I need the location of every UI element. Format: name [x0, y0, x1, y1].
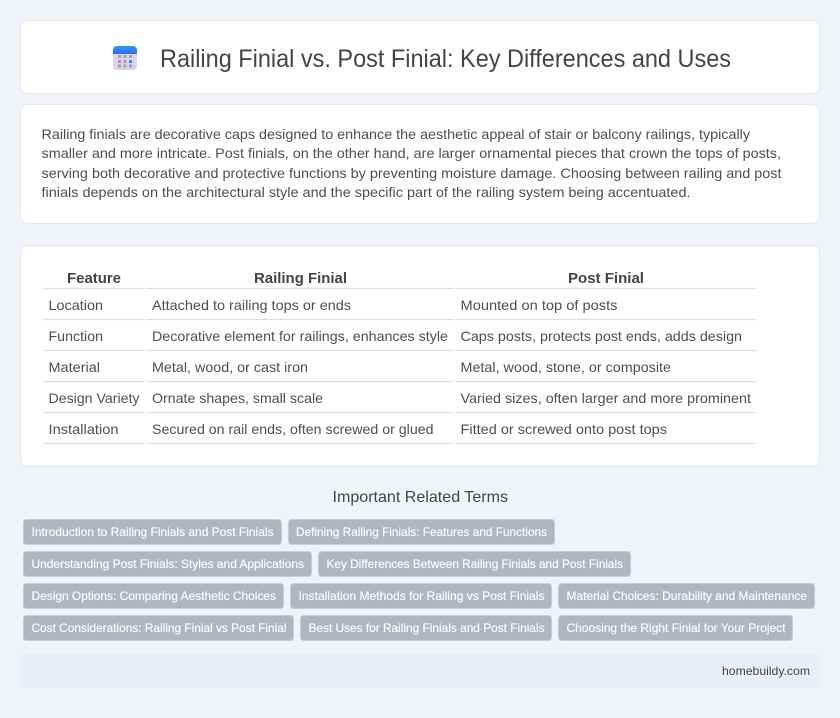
- panel: introduction text: Railing finials are decorative caps designed to enhance the aesthetic appeal of stair or balcony railings, typically: [42, 126, 750, 142]
- table row: design variety: Varied sizes, often larger and more prominent: [460, 390, 751, 406]
- heading: related terms: Important Related Terms: [332, 489, 508, 506]
- table row: installation: [43, 421, 756, 444]
- table row: material: Metal, wood, or cast iron: [152, 359, 308, 375]
- tag: Introduction to Railing Finials and Post Finials: [32, 525, 274, 539]
- tag: Understanding Post Finials: Styles and Applications: [32, 557, 304, 571]
- panel: introduction text: smaller and more intricate. Post finials, on the other hand, are larger ornamental pieces that crown the tops of posts,: [42, 145, 781, 161]
- table row: installation: Secured on rail ends, often screwed or glued: [152, 421, 434, 437]
- table row: material: Material: [48, 359, 100, 375]
- tag: Best Uses for Railing Finials and Post Finials: [308, 621, 544, 635]
- table row: design variety: [43, 390, 756, 412]
- table header row: Railing Finial: [254, 271, 347, 287]
- table row: location: [43, 297, 756, 320]
- tag: Choosing the Right Finial for Your Project: [566, 621, 786, 635]
- panel: introduction text: finials depends on the architectural style and the specific part of the railing system being accentuated.: [42, 184, 690, 200]
- tag: [24, 584, 284, 608]
- panel: introduction text: serving both decorative and protective functions by preventing moisture damage. Choosing between railing and post: [42, 165, 782, 181]
- footer bar: [20, 654, 820, 688]
- table row: location: Attached to railing tops or ends: [152, 297, 351, 313]
- table header row: [43, 271, 756, 288]
- title: Railing Finial vs. Post Finial: Key Differences and Uses: [160, 45, 731, 73]
- tag: Installation Methods for Railing vs Post Finials: [298, 589, 544, 603]
- tag: Defining Railing Finials: Features and Functions: [296, 525, 547, 539]
- table row: installation: Fitted or screwed onto post tops: [460, 421, 667, 437]
- tag: [558, 584, 814, 608]
- table row: material: Metal, wood, stone, or composite: [460, 359, 671, 375]
- table row: design variety: Design Variety: [48, 390, 140, 406]
- table row: function: Decorative element for railings, enhances style: [152, 328, 448, 344]
- table row: function: Caps posts, protects post ends, adds design: [460, 328, 742, 344]
- tag: [24, 520, 282, 544]
- panel: title header: [20, 20, 820, 94]
- table header row: Feature: [67, 271, 121, 287]
- tag: Design Options: Comparing Aesthetic Choices: [32, 589, 276, 603]
- tag: [288, 520, 554, 544]
- panel: introduction text: [20, 104, 820, 224]
- table row: installation: Installation: [48, 421, 118, 437]
- table row: location: Mounted on top of posts: [460, 297, 618, 313]
- table header row: Post Finial: [568, 271, 644, 287]
- tag: [290, 584, 552, 608]
- tag: [24, 552, 312, 576]
- tag list: related terms: [24, 520, 814, 640]
- icon: calendar: [113, 46, 137, 70]
- tag: [24, 616, 294, 640]
- table row: design variety: Ornate shapes, small scale: [152, 390, 323, 406]
- table row: material: [43, 359, 756, 382]
- table row: function: [43, 328, 756, 350]
- tag: Material Choices: Durability and Maintenance: [566, 589, 807, 603]
- tag: [558, 616, 792, 640]
- table row: function: Function: [48, 328, 103, 344]
- tag: Cost Considerations: Railing Finial vs Post Finial: [32, 621, 286, 635]
- table row: location: Location: [48, 297, 103, 313]
- tag: [300, 616, 552, 640]
- tag: Key Differences Between Railing Finials and Post Finials: [326, 557, 623, 571]
- panel: comparison table: [20, 246, 820, 466]
- tag: [318, 552, 630, 576]
- footer bar: homebuildy.com: [722, 664, 810, 678]
